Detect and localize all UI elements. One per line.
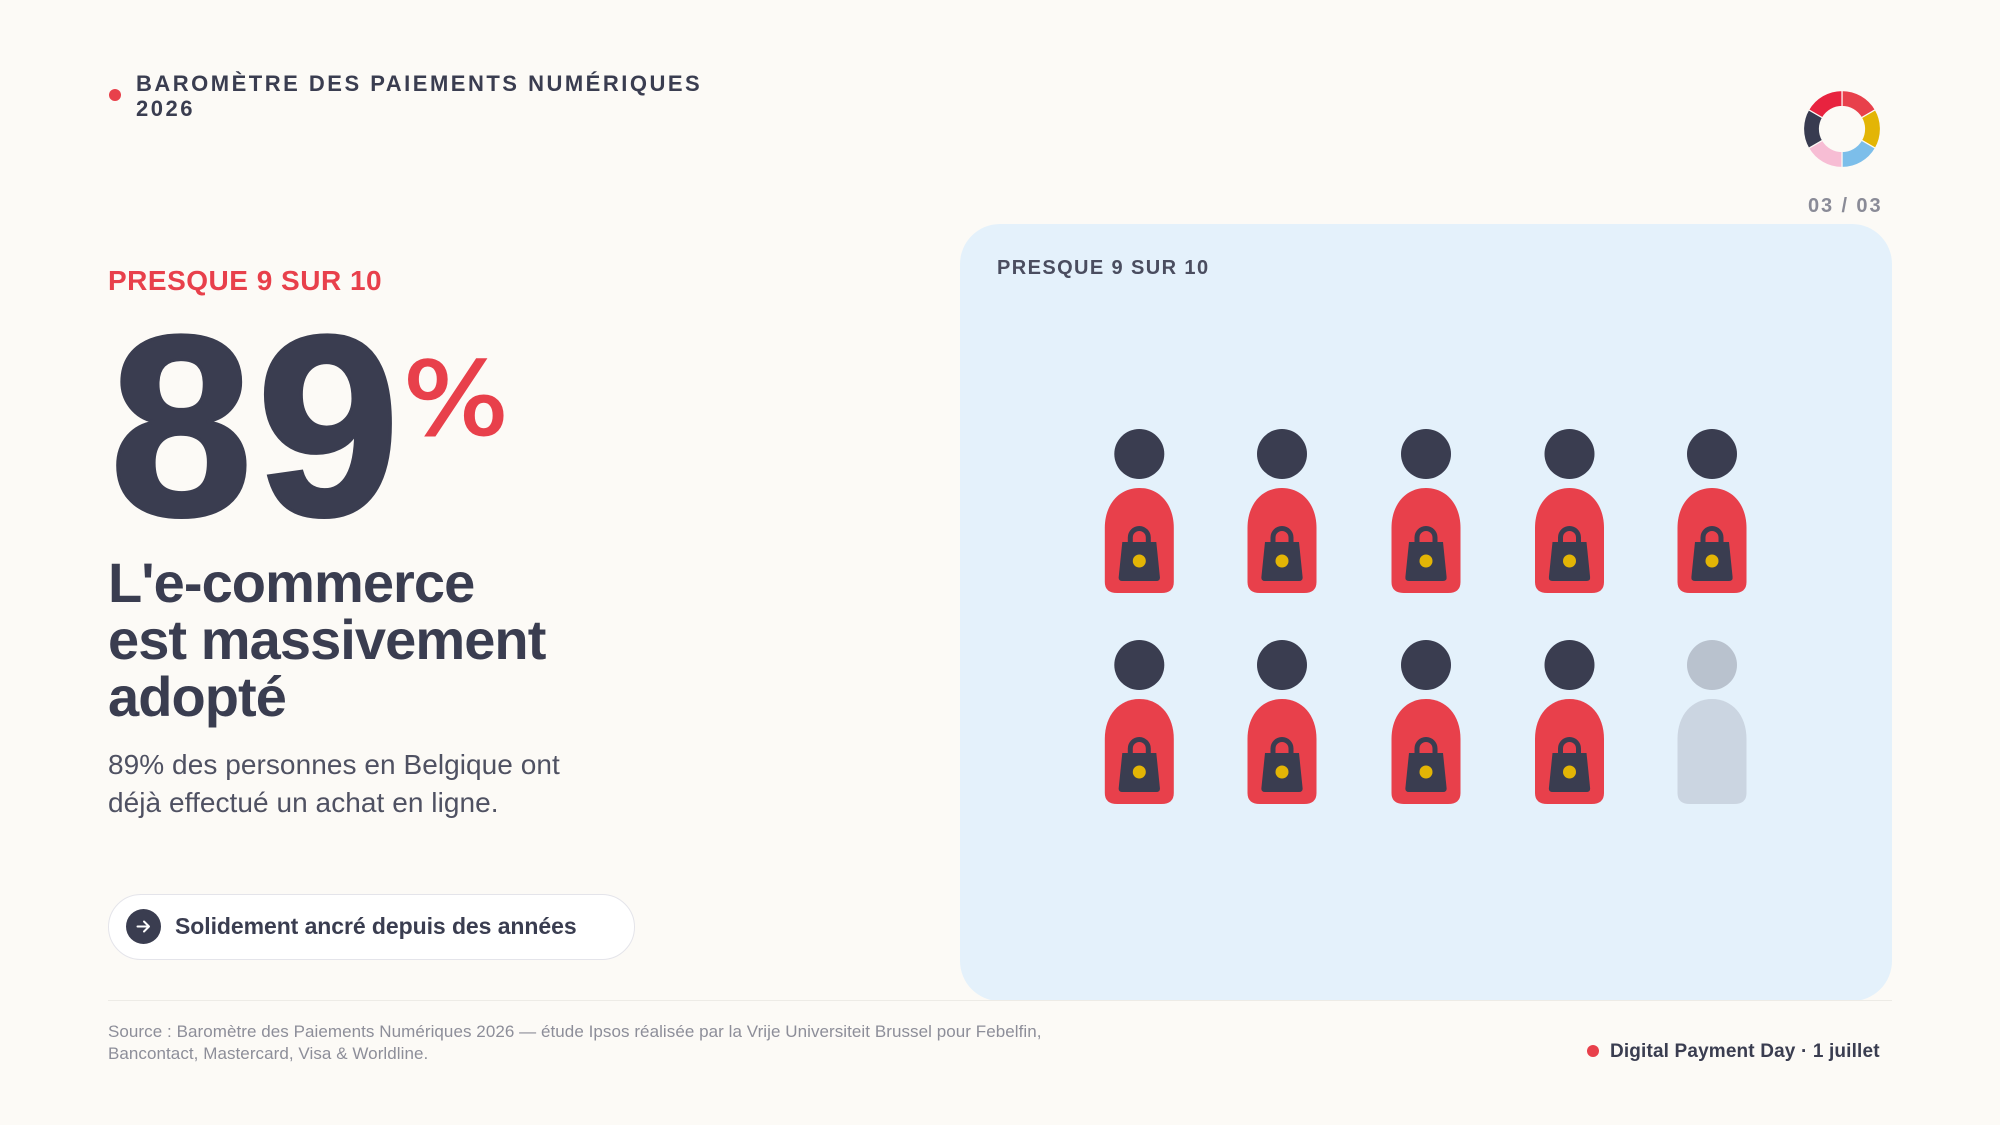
pill text: Solidement ancré depuis des années [175,913,577,939]
panel: pictogram [960,224,1892,1001]
event text: Digital Payment Day · 1 juillet [1610,1041,1880,1062]
header dot [109,89,121,101]
icon: colour donut logo [1804,91,1880,167]
headline [108,551,546,728]
person 4 [1535,429,1604,593]
source note: Source : Baromètre des Paiements Numériques 2026 — étude Ipsos réalisée par la Vrije Universiteit Brussel pour Febelfin, [108,1022,1042,1041]
person 1 [1105,429,1174,593]
person 5 [1678,429,1746,593]
header title [136,71,702,121]
big number: 89% [110,281,508,570]
headline: adopté [108,665,286,728]
page counter: 03 / 03 [1808,195,1882,217]
source note: Bancontact, Mastercard, Visa & Worldline. [108,1044,428,1062]
person 10: grey [1678,640,1746,804]
chart: 9 of 10 pictogram [1104,429,1746,804]
person 9 [1535,640,1604,804]
pill callout [108,894,635,960]
number 89: 89 [110,281,403,570]
kicker: PRESQUE 9 SUR 10 [108,265,382,296]
icon: arrow in circle [126,909,161,944]
event dot [1587,1045,1599,1057]
person 7 [1248,640,1316,804]
header title: BAROMÈTRE DES PAIEMENTS NUMÉRIQUES [136,71,702,96]
source note [108,1022,1042,1062]
panel heading: PRESQUE 9 SUR 10 [997,257,1209,279]
header: title with dot [109,71,702,121]
percent sign: % [403,340,508,458]
description: 89% des personnes en Belgique ont [108,748,560,780]
description: déjà effectué un achat en ligne. [108,787,499,818]
person 3 [1392,429,1460,593]
person 8 [1392,640,1460,804]
event tag [1587,1041,1880,1062]
description [108,748,560,818]
headline: L'e-commerce [108,551,474,614]
person 2 [1248,429,1316,593]
headline: est massivement [108,608,545,671]
header title: 2026 [136,96,195,121]
footer divider [108,1000,1892,1001]
person 6 [1105,640,1174,804]
